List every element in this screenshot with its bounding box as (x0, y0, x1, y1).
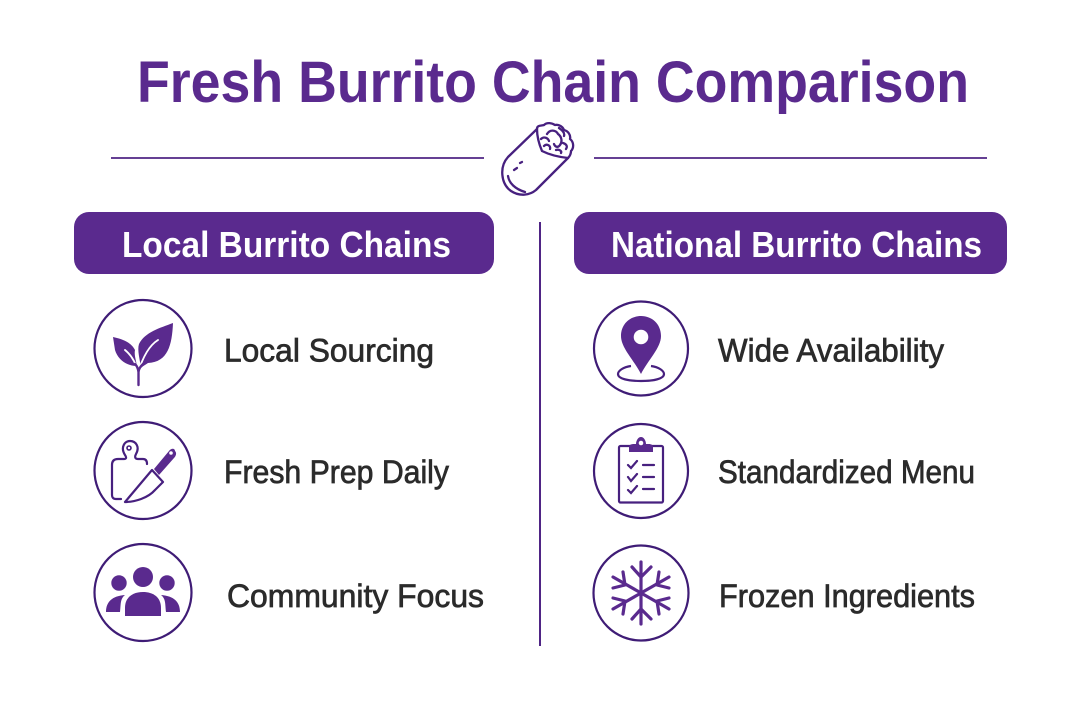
item: local sourcing (94, 300, 434, 397)
item: fresh prep daily (94, 422, 449, 519)
heading: national burrito chains (574, 212, 1007, 274)
heading: local burrito chains (74, 212, 494, 274)
panel: local burrito chains (74, 212, 494, 641)
item: standardized menu: Standardized Menu (718, 454, 975, 490)
vertical divider (539, 222, 541, 646)
item: community focus (94, 544, 484, 641)
item: frozen ingredients (594, 546, 975, 640)
item: local sourcing: Local Sourcing (224, 332, 434, 368)
heading: national burrito chains: National Burrito Chains (611, 224, 982, 265)
panel: national burrito chains (574, 212, 1007, 640)
item: community focus: Community Focus (227, 578, 484, 614)
item: frozen ingredients: Frozen Ingredients (719, 578, 975, 614)
icon: burrito (502, 123, 573, 195)
item: fresh prep daily: Fresh Prep Daily (224, 454, 449, 490)
item: wide availability (594, 302, 944, 396)
heading: local burrito chains: Local Burrito Chains (122, 224, 451, 265)
item: wide availability: Wide Availability (718, 332, 944, 368)
title: Fresh Burrito Chain Comparison (137, 50, 969, 115)
item: standardized menu (594, 424, 975, 518)
